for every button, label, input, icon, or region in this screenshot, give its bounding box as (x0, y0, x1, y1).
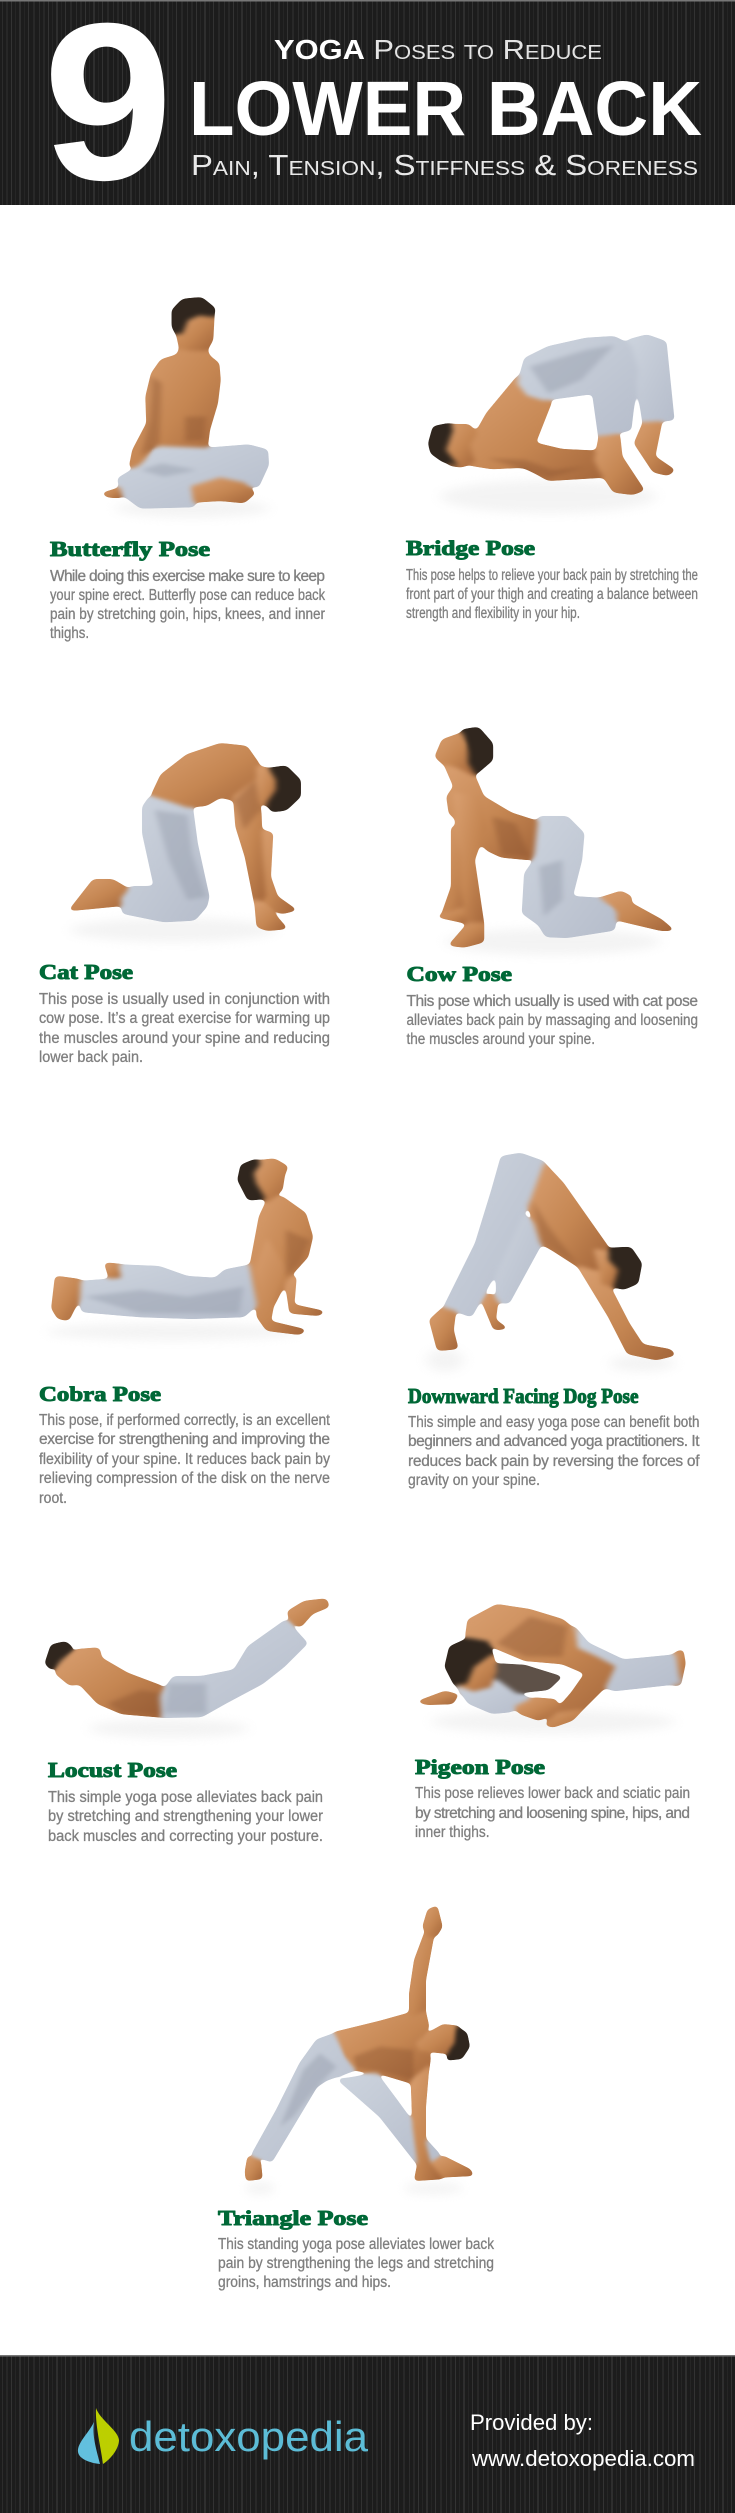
icon: detoxopedia drop logo (78, 2408, 119, 2464)
heading: triangle pose: Triangle Pose (218, 2206, 368, 2230)
figure: downward facing dog pose (427, 1153, 675, 1372)
text: butterfly description (50, 568, 325, 642)
heading: cat pose: Cat Pose (39, 960, 133, 984)
footer banner (0, 2355, 735, 2513)
panel: triangle pose (218, 1907, 494, 2291)
text: triangle description: groins, hamstrings and hips. (218, 2274, 391, 2291)
text: triangle description: This standing yoga pose alleviates lower back (218, 2236, 494, 2253)
text: cat description: lower back pain. (39, 1049, 143, 1066)
text: locust description (48, 1789, 323, 1845)
text: cow description: alleviates back pain by massaging and loosening (406, 1012, 698, 1029)
text: cobra description (39, 1412, 331, 1507)
logo wordmark: detoxopedia (129, 2413, 369, 2460)
heading: bridge pose: Bridge Pose (406, 536, 535, 560)
heading: cobra pose: Cobra Pose (39, 1382, 161, 1406)
text: pigeon description: inner thighs. (415, 1824, 490, 1841)
title line two: LOWER BACK (189, 66, 702, 152)
text: butterfly description: While doing this exercise make sure to keep (50, 568, 325, 585)
text: cobra description: relieving compression of the disk on the nerve (39, 1470, 330, 1487)
text: butterfly description: thighs. (50, 625, 89, 642)
panel: locust pose (45, 1599, 328, 1845)
provided by label: Provided by: (470, 2410, 593, 2435)
text: downward dog description (408, 1414, 700, 1489)
panel: butterfly pose (50, 298, 325, 642)
panel: cat pose (39, 744, 330, 1066)
text: triangle description (218, 2236, 494, 2291)
text: cat description: This pose is usually used in conjunction with (39, 991, 330, 1008)
header banner (0, 0, 735, 227)
figure: pigeon pose (419, 1605, 684, 1734)
figure: bridge pose (429, 335, 674, 513)
website address: www.detoxopedia.com (471, 2446, 695, 2471)
title line three: Pain, Tension, Stiffness & Soreness (191, 150, 698, 182)
heading: cow pose: Cow Pose (406, 962, 512, 986)
panel: cobra pose (39, 1159, 331, 1507)
text: downward dog description: This simple and easy yoga pose can benefit both (408, 1414, 700, 1431)
figure: butterfly pose (103, 298, 270, 518)
text: bridge description (406, 567, 698, 622)
text: pigeon description: This pose relieves lower back and sciatic pain (415, 1785, 690, 1802)
text: cobra description: flexibility of your spine. It reduces back pain by (39, 1451, 330, 1468)
figure: cobra pose (47, 1159, 323, 1340)
figure: triangle pose (245, 1907, 473, 2194)
figure: locust pose (45, 1599, 328, 1738)
panel: downward facing dog pose (408, 1153, 700, 1489)
text: cat description (39, 991, 330, 1066)
text: cat description: the muscles around your spine and reducing (39, 1030, 330, 1047)
panel: cow pose (406, 727, 698, 1048)
text: downward dog description: reduces back pain by reversing the forces of (408, 1453, 700, 1470)
heading: pigeon pose: Pigeon Pose (415, 1755, 545, 1779)
text: cow description (406, 993, 698, 1048)
panel: bridge pose (406, 335, 698, 622)
text: cobra description: exercise for strengthening and improving the (39, 1431, 330, 1448)
figure: cow pose (436, 727, 673, 955)
text: cow description: This pose which usually is used with cat pose (406, 993, 698, 1010)
figure: cat pose (70, 744, 300, 942)
text: cow description: the muscles around your spine. (406, 1031, 595, 1048)
heading: downward facing dog pose: Downward Facing Dog Pose (408, 1384, 638, 1408)
text: bridge description: strength and flexibility in your hip. (406, 605, 580, 622)
panel: pigeon pose (415, 1605, 690, 1841)
text: pigeon description (415, 1785, 690, 1841)
text: cobra description: root. (39, 1490, 67, 1507)
text: pigeon description: by stretching and loosening spine, hips, and (415, 1805, 690, 1822)
text: locust description: back muscles and correcting your posture. (48, 1828, 323, 1845)
text: butterfly description: pain by stretching goin, hips, knees, and inner (50, 606, 325, 623)
title line one: YOGA Poses to Reduce (274, 34, 602, 65)
text: cat description: cow pose. It’s a great exercise for warming up (39, 1010, 330, 1027)
text: locust description: This simple yoga pose alleviates back pain (48, 1789, 323, 1806)
text: downward dog description: beginners and advanced yoga practitioners. It (408, 1433, 700, 1450)
text: butterfly description: your spine erect. Butterfly pose can reduce back (50, 587, 325, 604)
text: cobra description: This pose, if performed correctly, is an excellent (39, 1412, 331, 1429)
heading: locust pose: Locust Pose (48, 1758, 177, 1782)
text: locust description: by stretching and strengthening your lower (48, 1808, 323, 1825)
text: triangle description: pain by strengthening the legs and stretching (218, 2255, 494, 2272)
text: downward dog description: gravity on your spine. (408, 1472, 540, 1489)
heading: butterfly pose: Butterfly Pose (50, 537, 210, 561)
